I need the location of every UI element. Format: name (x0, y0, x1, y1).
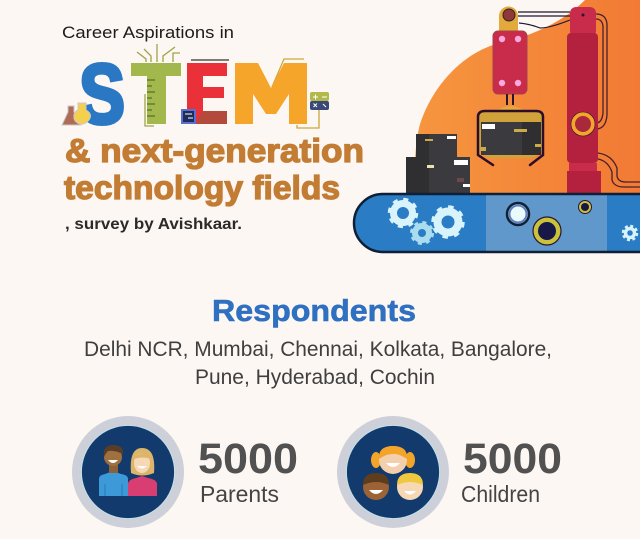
wires behind column (596, 14, 640, 187)
conveyor belt (354, 194, 640, 252)
icon: calculator (310, 92, 329, 110)
orange backdrop (414, 0, 640, 194)
rollers (507, 200, 592, 245)
number: 5000 children: 5000 (463, 435, 562, 483)
survey credit: , survey by Avishkaar. (65, 216, 242, 233)
letter E (187, 63, 227, 124)
arm body (493, 31, 527, 94)
title: STEM lettering (62, 44, 329, 141)
subtitle: next-generation technology fields: technology fields (64, 169, 340, 206)
illustration: robot arm on conveyor (354, 0, 640, 252)
cities list (84, 338, 552, 389)
label: parents: Parents (200, 481, 279, 507)
subtitle: next-generation technology fields (64, 132, 364, 206)
subtitle: next-generation technology fields: & next-generation (65, 132, 364, 169)
heading: career aspirations: Career Aspirations in (62, 23, 234, 42)
gripper holding box (478, 94, 543, 165)
letter M (235, 63, 307, 124)
icon: flasks (62, 103, 90, 125)
arm joint (499, 6, 518, 31)
circuit lines above T (137, 44, 319, 128)
cables between arm and column (518, 12, 570, 28)
heading: respondents: Respondents (212, 293, 416, 328)
E shading (195, 111, 227, 124)
icon: chip (182, 110, 195, 123)
icon: parents (72, 416, 184, 528)
icon: children (337, 416, 449, 528)
letter S: S (79, 47, 125, 141)
ruler ticks on T (147, 80, 155, 116)
stat: children (337, 416, 562, 528)
cities list: Delhi NCR, Mumbai, Chennai, Kolkata, Bangalore, (84, 338, 552, 361)
letter T (131, 63, 181, 124)
gears (390, 200, 637, 244)
label: children: Children (461, 481, 540, 507)
column (567, 7, 601, 193)
cities list: Pune, Hyderabad, Cochin (195, 366, 435, 389)
stat: parents (72, 416, 298, 528)
number: 5000 parents: 5000 (198, 435, 298, 483)
stacked boxes (406, 134, 470, 193)
